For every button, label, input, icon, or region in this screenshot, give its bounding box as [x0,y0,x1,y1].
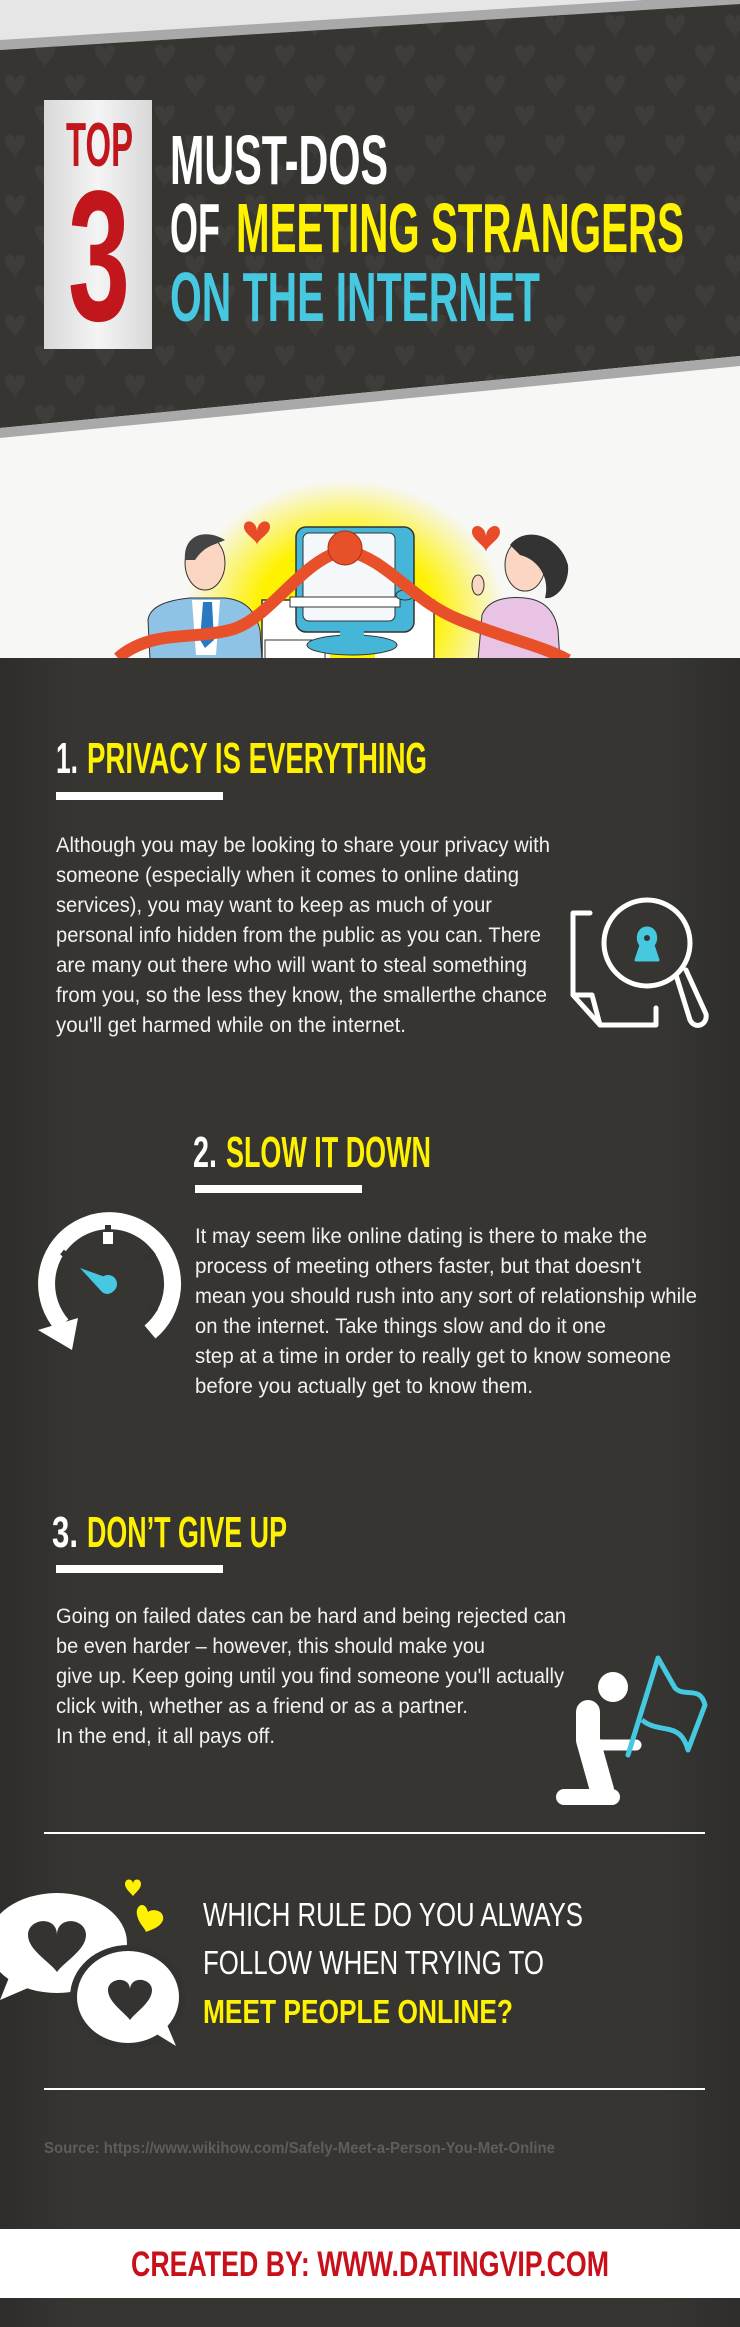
paragraph 1: you'll get harmed while on the internet. [56,1014,406,1037]
title block [44,100,684,360]
question text [203,1896,583,2030]
paragraph 2: It may seem like online dating is there to make the [195,1225,647,1248]
paragraph 3 [56,1605,566,1748]
icon: magnifier over document with keyhole [573,900,706,1025]
man [148,534,262,660]
paragraph 3: be even harder – however, this should make you [56,1635,485,1658]
paragraph 3: Going on failed dates can be hard and being rejected can [56,1605,566,1628]
icon: speedometer [38,1221,173,1350]
heading 3 [52,1508,287,1557]
paragraph 2: mean you should rush into any sort of relationship while [195,1285,697,1308]
paragraph 1: are many out there who will want to steal something [56,954,527,977]
paragraph 2: on the internet. Take things slow and do it one [195,1315,606,1338]
paragraph 3: click with, whether as a friend or as a partner. [56,1695,468,1718]
question text: WHICH RULE DO YOU ALWAYS [203,1896,583,1933]
paragraph 2: step at a time in order to really get to know someone [195,1345,671,1368]
section 1: privacy [56,734,706,1037]
header background [0,0,740,658]
heading 3: 3. [52,1508,78,1557]
heading 2 [193,1128,431,1177]
top 3 box [44,100,152,360]
question text: FOLLOW WHEN TRYING TO [203,1944,544,1981]
paragraph 1: services), you may want to keep as much of your [56,894,492,917]
paragraph 2: before you actually get to know them. [195,1375,533,1398]
desk [262,600,434,660]
title text: OF [170,189,220,267]
paragraph 1: Although you may be looking to share your privacy with [56,834,550,857]
paragraph 3: In the end, it all pays off. [56,1725,275,1748]
footer credit [0,2229,740,2298]
heading 1: 1. [56,734,78,783]
question text: MEET PEOPLE ONLINE? [203,1993,513,2030]
title text [170,121,684,336]
background dark [0,658,740,2327]
section 2: slow it down [38,1128,697,1398]
source: Source: https://www.wikihow.com/Safely-Meet-a-Person-You-Met-Online [44,2140,555,2157]
ribbon [118,550,568,660]
paragraph 1 [56,834,550,1037]
paragraph 2 [195,1225,697,1398]
section 3: don't give up [52,1508,705,1797]
hearts [244,521,270,545]
heading 1 [56,734,427,783]
question callout [0,1880,583,2049]
woman [472,535,568,660]
icon: speech bubbles with hearts [0,1880,186,2049]
heading 1: PRIVACY IS EVERYTHING [87,734,427,783]
footer credit: CREATED BY: WWW.DATINGVIP.COM [131,2245,609,2284]
icon: kneeling person with flag [564,1658,705,1797]
heading 2: 2. [193,1128,217,1177]
paragraph 1: personal info hidden from the public as you can. There [56,924,541,947]
paragraph 1: someone (especially when it comes to online dating [56,864,519,887]
top 3 box: TOP [66,111,133,180]
monitor [296,527,414,632]
paragraph 1: from you, so the less they know, the smallerthe chance [56,984,547,1007]
illustration: couple connected by computer [114,482,571,658]
heading 2: SLOW IT DOWN [226,1128,431,1177]
heading 3: DON’T GIVE UP [87,1508,287,1557]
title text: MUST-DOS [170,121,388,199]
paragraph 2: process of meeting others faster, but that doesn't [195,1255,641,1278]
paragraph 3: give up. Keep going until you find someone you'll actually [56,1665,564,1688]
top 3 box: 3 [68,153,130,360]
